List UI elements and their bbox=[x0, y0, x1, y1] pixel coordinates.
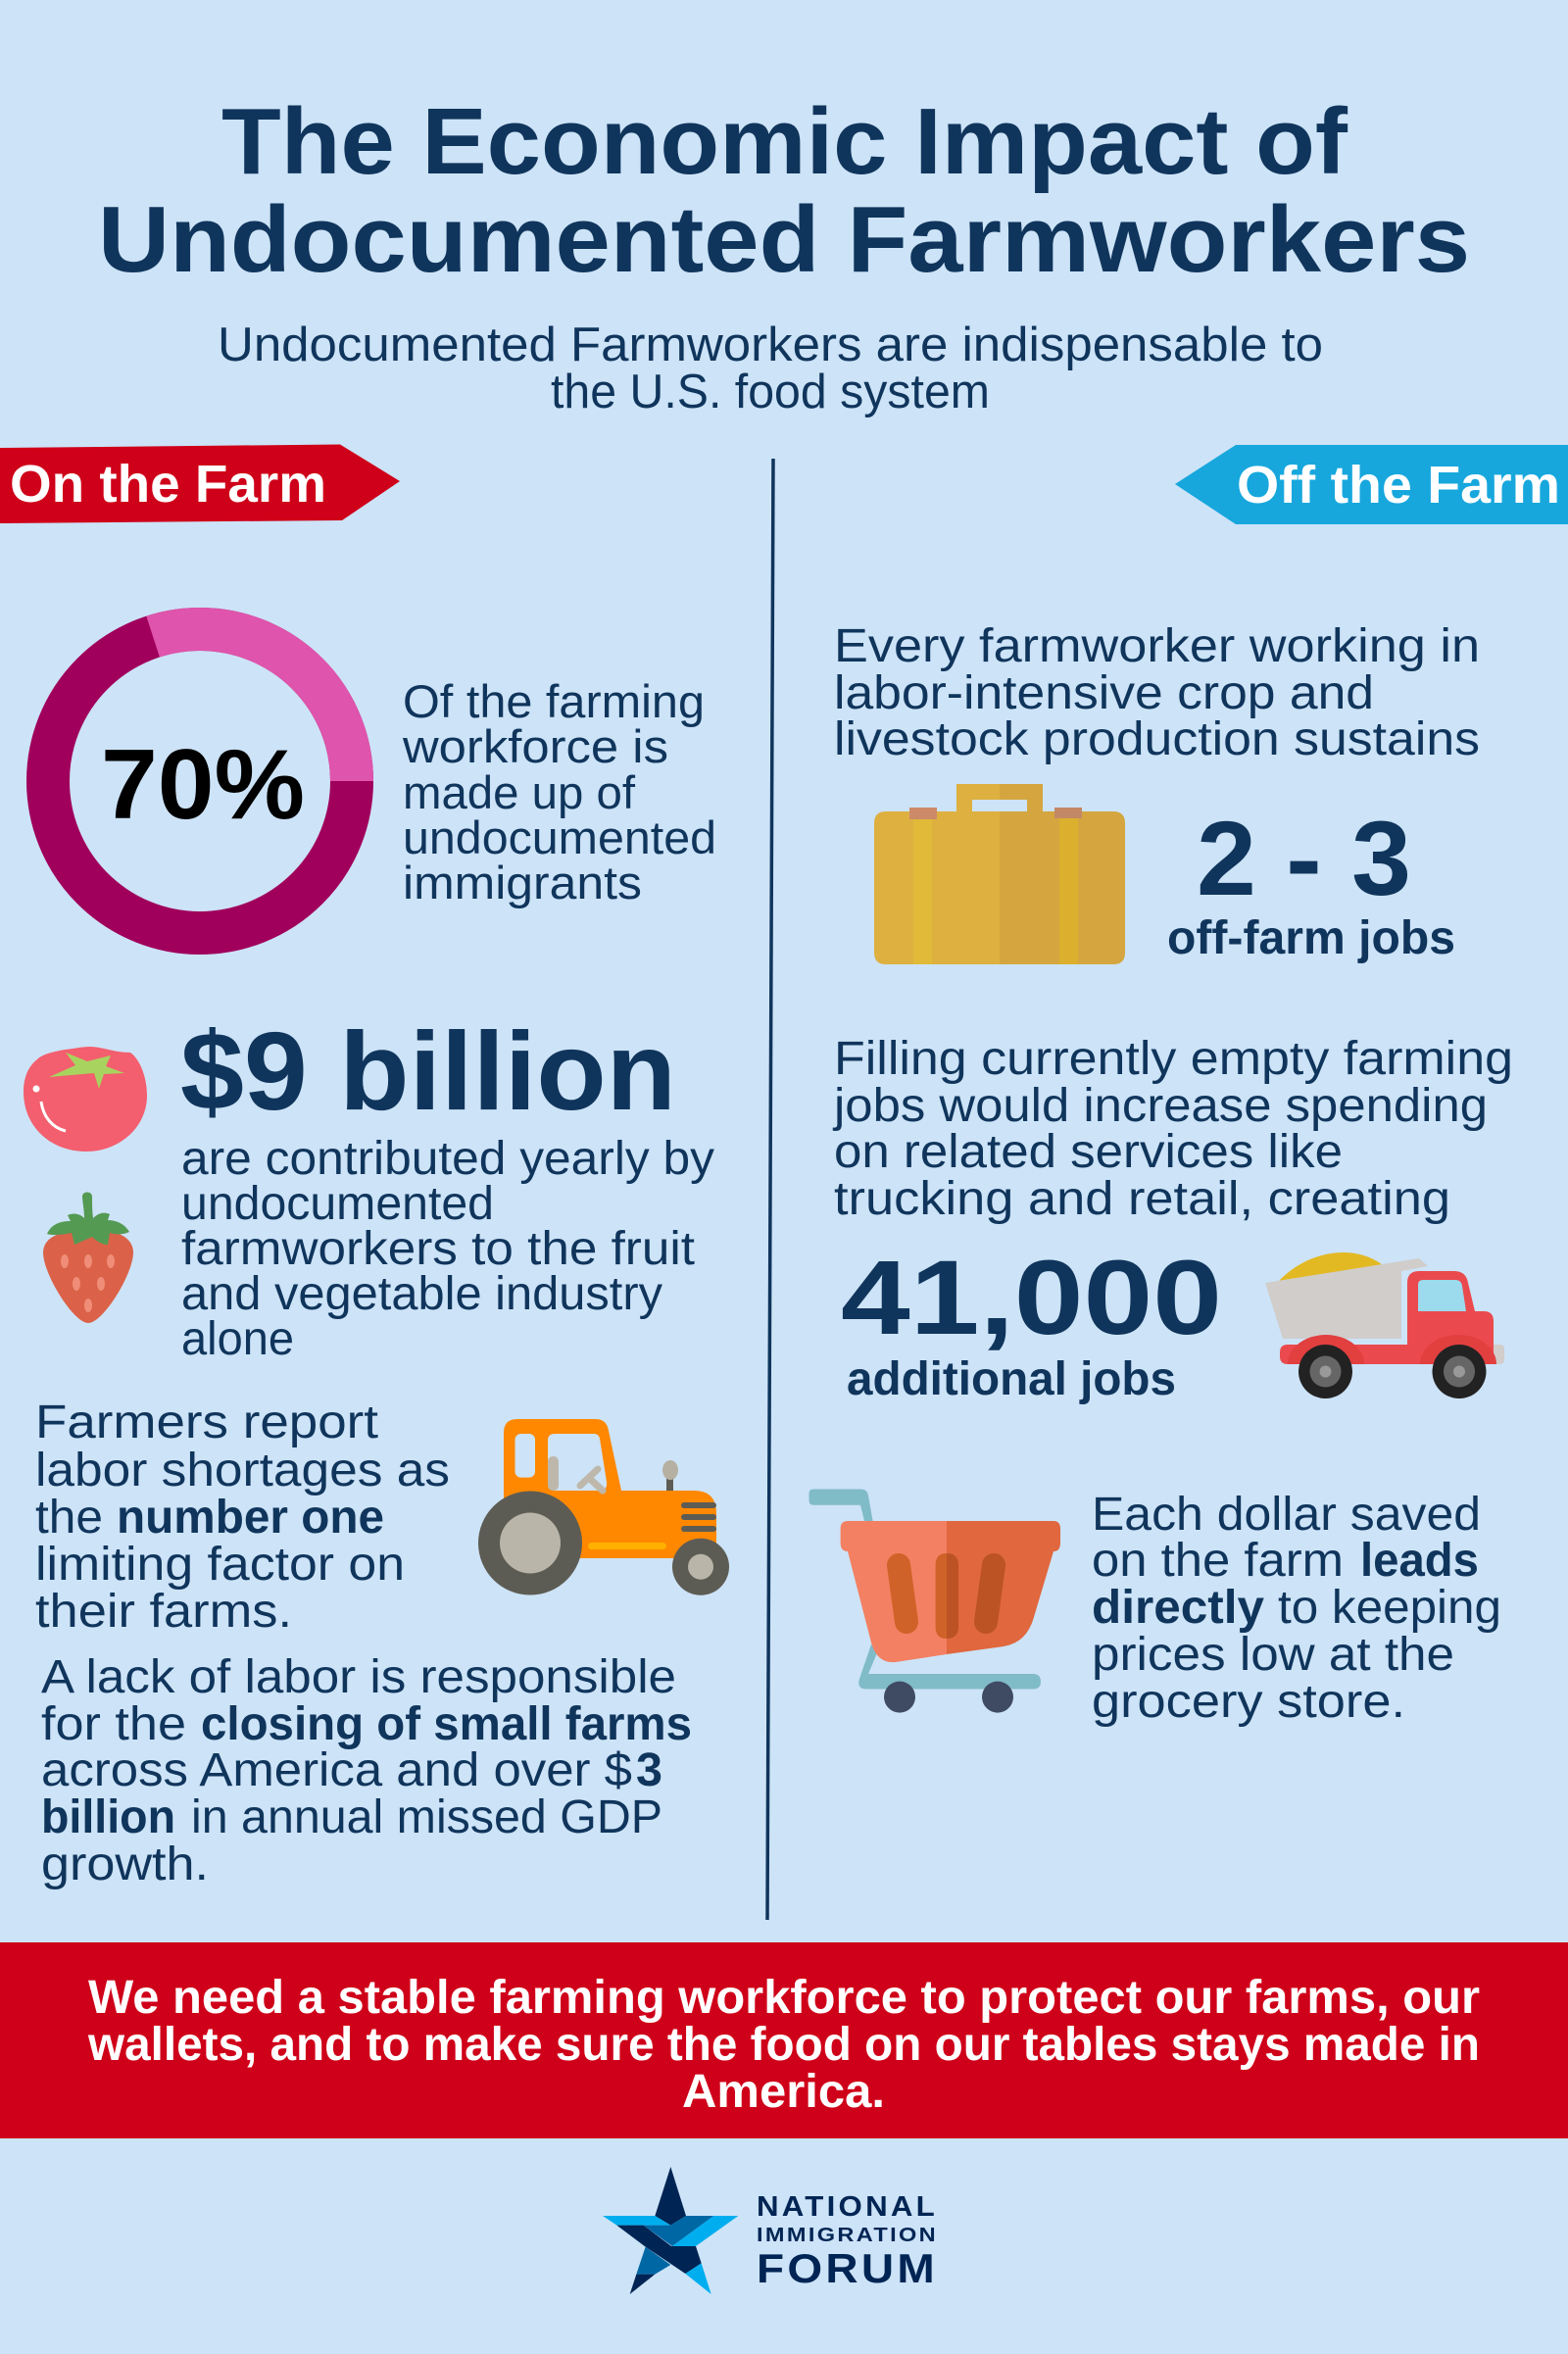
text: every farmworker sustains: livestock production sustains bbox=[834, 713, 1480, 765]
subtitle: the U.S. food system bbox=[551, 366, 990, 418]
text: workforce share: undocumented bbox=[403, 811, 716, 863]
text: each dollar saved: grocery store. bbox=[1092, 1676, 1405, 1728]
text: labor shortages: number one bbox=[117, 1492, 384, 1544]
text: workforce share: Of the farming bbox=[403, 675, 705, 727]
title: The Economic Impact of bbox=[221, 89, 1348, 194]
text: fruit and vegetable contribution: and vegetable industry bbox=[181, 1268, 662, 1320]
icon: strawberry bbox=[43, 1192, 133, 1323]
text: closing of small farms: in annual missed GDP bbox=[191, 1791, 662, 1843]
text: filling empty jobs bbox=[832, 1033, 1513, 1225]
logo wordmark: FORUM bbox=[757, 2245, 938, 2291]
icon: tomato bbox=[24, 1047, 147, 1152]
text: workforce share: immigrants bbox=[403, 857, 642, 908]
icon: shopping cart bbox=[809, 1490, 1060, 1713]
donut chart: 70 percent bbox=[48, 629, 352, 933]
banner: on the farm bbox=[0, 445, 400, 523]
panel: off the farm bbox=[809, 445, 1568, 1728]
text: workforce share: made up of bbox=[403, 766, 636, 818]
stat: 2 to 3 off-farm jobs: 2 - 3 bbox=[1197, 799, 1411, 917]
text: every farmworker sustains: Every farmworker working in bbox=[834, 620, 1480, 672]
callout band: America. bbox=[682, 2066, 885, 2118]
stat: 9 billion: $9 billion bbox=[180, 1009, 676, 1133]
text: labor shortages: their farms. bbox=[35, 1586, 292, 1638]
subtitle: Undocumented Farmworkers are indispensable to bbox=[218, 319, 1323, 371]
text: filling empty jobs: jobs would increase spending bbox=[832, 1080, 1488, 1132]
text: closing of small farms: billion bbox=[41, 1791, 175, 1843]
text: labor shortages: Farmers report bbox=[35, 1397, 378, 1448]
text: each dollar saved: leads bbox=[1360, 1535, 1479, 1587]
subtitle bbox=[218, 319, 1323, 418]
text: each dollar saved: Each dollar saved bbox=[1092, 1489, 1481, 1541]
text: fruit and vegetable contribution bbox=[181, 1133, 714, 1365]
stat: 41,000 additional jobs bbox=[841, 1238, 1222, 1405]
banner: off the farm bbox=[1175, 445, 1568, 524]
stat: 41,000 additional jobs: 41,000 bbox=[841, 1238, 1222, 1356]
text: filling empty jobs: trucking and retail, creating bbox=[834, 1173, 1450, 1225]
text: fruit and vegetable contribution: undocumented bbox=[181, 1178, 494, 1230]
icon: suitcase bbox=[874, 784, 1125, 964]
donut chart: 70 percent: 70% bbox=[101, 730, 305, 840]
text: closing of small farms: closing of small farms bbox=[201, 1698, 692, 1750]
icon: star bbox=[603, 2167, 738, 2294]
logo wordmark bbox=[757, 2191, 938, 2291]
callout band bbox=[0, 1942, 1568, 2138]
text: workforce share bbox=[402, 675, 716, 908]
logo wordmark: IMMIGRATION bbox=[757, 2225, 938, 2246]
text: fruit and vegetable contribution: are contributed yearly by bbox=[181, 1133, 714, 1185]
banner: on the farm: On the Farm bbox=[10, 455, 326, 514]
text: labor shortages bbox=[35, 1397, 450, 1638]
text: filling empty jobs: on related services like bbox=[834, 1126, 1343, 1178]
stat: 2 to 3 off-farm jobs bbox=[1167, 799, 1455, 964]
stat: 41,000 additional jobs: additional jobs bbox=[847, 1353, 1176, 1405]
text: each dollar saved bbox=[1092, 1489, 1501, 1728]
text: labor shortages: limiting factor on bbox=[35, 1539, 405, 1591]
banner: off the farm: Off the Farm bbox=[1237, 456, 1560, 515]
text: every farmworker sustains bbox=[834, 620, 1480, 765]
title: Undocumented Farmworkers bbox=[98, 187, 1470, 292]
text: workforce share: workforce is bbox=[402, 720, 668, 772]
text: labor shortages: the bbox=[35, 1492, 103, 1544]
text: closing of small farms bbox=[41, 1651, 692, 1890]
text: labor shortages: labor shortages as bbox=[35, 1445, 450, 1496]
logo: national immigration forum bbox=[603, 2167, 938, 2294]
text: closing of small farms: 3 bbox=[636, 1744, 662, 1796]
text: fruit and vegetable contribution: alone bbox=[181, 1313, 294, 1365]
logo wordmark: NATIONAL bbox=[757, 2191, 938, 2223]
center divider bbox=[767, 459, 773, 1920]
callout band: We need a stable farming workforce to protect our farms, our bbox=[88, 1972, 1480, 2024]
callout band: wallets, and to make sure the food on our tables stays made in bbox=[87, 2019, 1480, 2071]
title bbox=[98, 89, 1470, 292]
text: every farmworker sustains: labor-intensive crop and bbox=[834, 667, 1374, 719]
text: each dollar saved: prices low at the bbox=[1092, 1629, 1454, 1681]
text: fruit and vegetable contribution: farmworkers to the fruit bbox=[181, 1223, 695, 1275]
icon: dump truck bbox=[1265, 1252, 1504, 1398]
text: closing of small farms: growth. bbox=[41, 1839, 209, 1890]
icon: tractor bbox=[478, 1419, 729, 1595]
text: closing of small farms: for the bbox=[41, 1698, 186, 1750]
text: filling empty jobs: Filling currently empty farming bbox=[834, 1033, 1513, 1085]
text: each dollar saved: to keeping bbox=[1278, 1582, 1501, 1634]
text: each dollar saved: directly bbox=[1092, 1582, 1264, 1634]
text: closing of small farms: A lack of labor is responsible bbox=[41, 1651, 676, 1703]
stat: 2 to 3 off-farm jobs: off-farm jobs bbox=[1167, 912, 1455, 964]
text: each dollar saved: on the farm bbox=[1092, 1535, 1344, 1587]
panel: on the farm bbox=[0, 445, 729, 1890]
text: closing of small farms: across America and over $ bbox=[41, 1744, 632, 1796]
